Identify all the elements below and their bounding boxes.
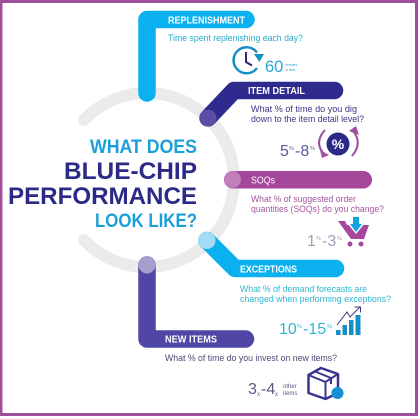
title [8, 137, 197, 232]
exceptions question: changed when performing exceptions? [240, 294, 391, 305]
stat: 10-15 percent: % [297, 324, 302, 330]
stat: 1-3 percent: 1 [307, 233, 316, 250]
replenishment heading: REPLENISHMENT [168, 14, 245, 26]
stat: 3x-4x other items: x [257, 392, 260, 398]
stat: 5-8 percent: 5 [280, 143, 289, 160]
stat: 3x-4x other items: -4 [261, 381, 275, 398]
stat: 1-3 percent: % [316, 236, 321, 242]
panel: soqs [224, 171, 384, 250]
stat: 60 minutes [265, 58, 298, 76]
stat: 1-3 percent: -3 [322, 233, 336, 250]
stat: 10-15 percent: -15 [303, 321, 326, 338]
item detail heading: ITEM DETAIL [248, 85, 306, 97]
item detail connector bar [208, 90, 334, 118]
new items heading: NEW ITEMS [165, 334, 217, 346]
grey ring [84, 93, 234, 267]
exceptions node [198, 232, 216, 249]
stat: 5-8 percent: % [310, 146, 315, 152]
stat: 60 minutes: or less [285, 68, 296, 72]
icon: clock [234, 47, 264, 73]
item detail question: down to the item detail level? [251, 114, 364, 125]
panel: replenishment [147, 14, 303, 93]
icon: cart with arrow [338, 216, 369, 246]
stat: 5-8 percent: % [289, 146, 294, 152]
icon: rising bars with arrow [336, 307, 360, 335]
panel: exceptions [198, 232, 391, 338]
soqs bar [224, 171, 372, 188]
exceptions heading: EXCEPTIONS [240, 264, 297, 276]
new items connector bar [147, 265, 246, 339]
replenishment connector bar [147, 20, 246, 93]
stat: 3x-4x other items: x [275, 392, 278, 398]
exceptions connector bar [207, 240, 336, 268]
stat: 10-15 percent [279, 321, 332, 338]
panel: new items [138, 256, 344, 399]
stat: 10-15 percent: % [327, 324, 332, 330]
stat: 3x-4x other items: items [283, 391, 297, 397]
stat: 3x-4x other items [248, 381, 297, 398]
stat: 60 minutes: 60 [265, 58, 283, 76]
title: LOOK LIKE? [95, 211, 197, 232]
icon: percent cycle [319, 126, 359, 158]
new items question: What % of time do you invest on new items? [165, 353, 337, 364]
exceptions question: What % of demand forecasts are [240, 284, 367, 295]
icon: package box with badge [308, 368, 344, 399]
title: WHAT DOES [90, 137, 197, 158]
title: PERFORMANCE [8, 183, 197, 210]
new items node [138, 256, 156, 274]
stat: 5-8 percent: -8 [295, 143, 309, 160]
stat: 3x-4x other items: other [283, 384, 297, 390]
soqs question: What % of suggested order [251, 194, 356, 205]
panel: item detail [200, 85, 364, 160]
stat: 3x-4x other items: 3 [248, 381, 257, 398]
item detail question: What % of time do you dig [251, 104, 357, 115]
soqs heading: SOQs [251, 176, 275, 186]
soqs question: quantities (SOQs) do you change? [251, 204, 384, 215]
title: BLUE-CHIP [64, 158, 197, 185]
stat: 1-3 percent: % [337, 236, 342, 242]
item detail node [200, 110, 216, 126]
stat: 5-8 percent [280, 143, 315, 160]
replenishment question: Time spent replenishing each day? [168, 33, 303, 44]
stat: 60 minutes: minutes [285, 63, 298, 67]
stat: 1-3 percent [307, 233, 342, 250]
stat: 10-15 percent: 10 [279, 321, 297, 338]
soqs node [224, 171, 241, 188]
icon: percent cycle: % [332, 136, 345, 152]
